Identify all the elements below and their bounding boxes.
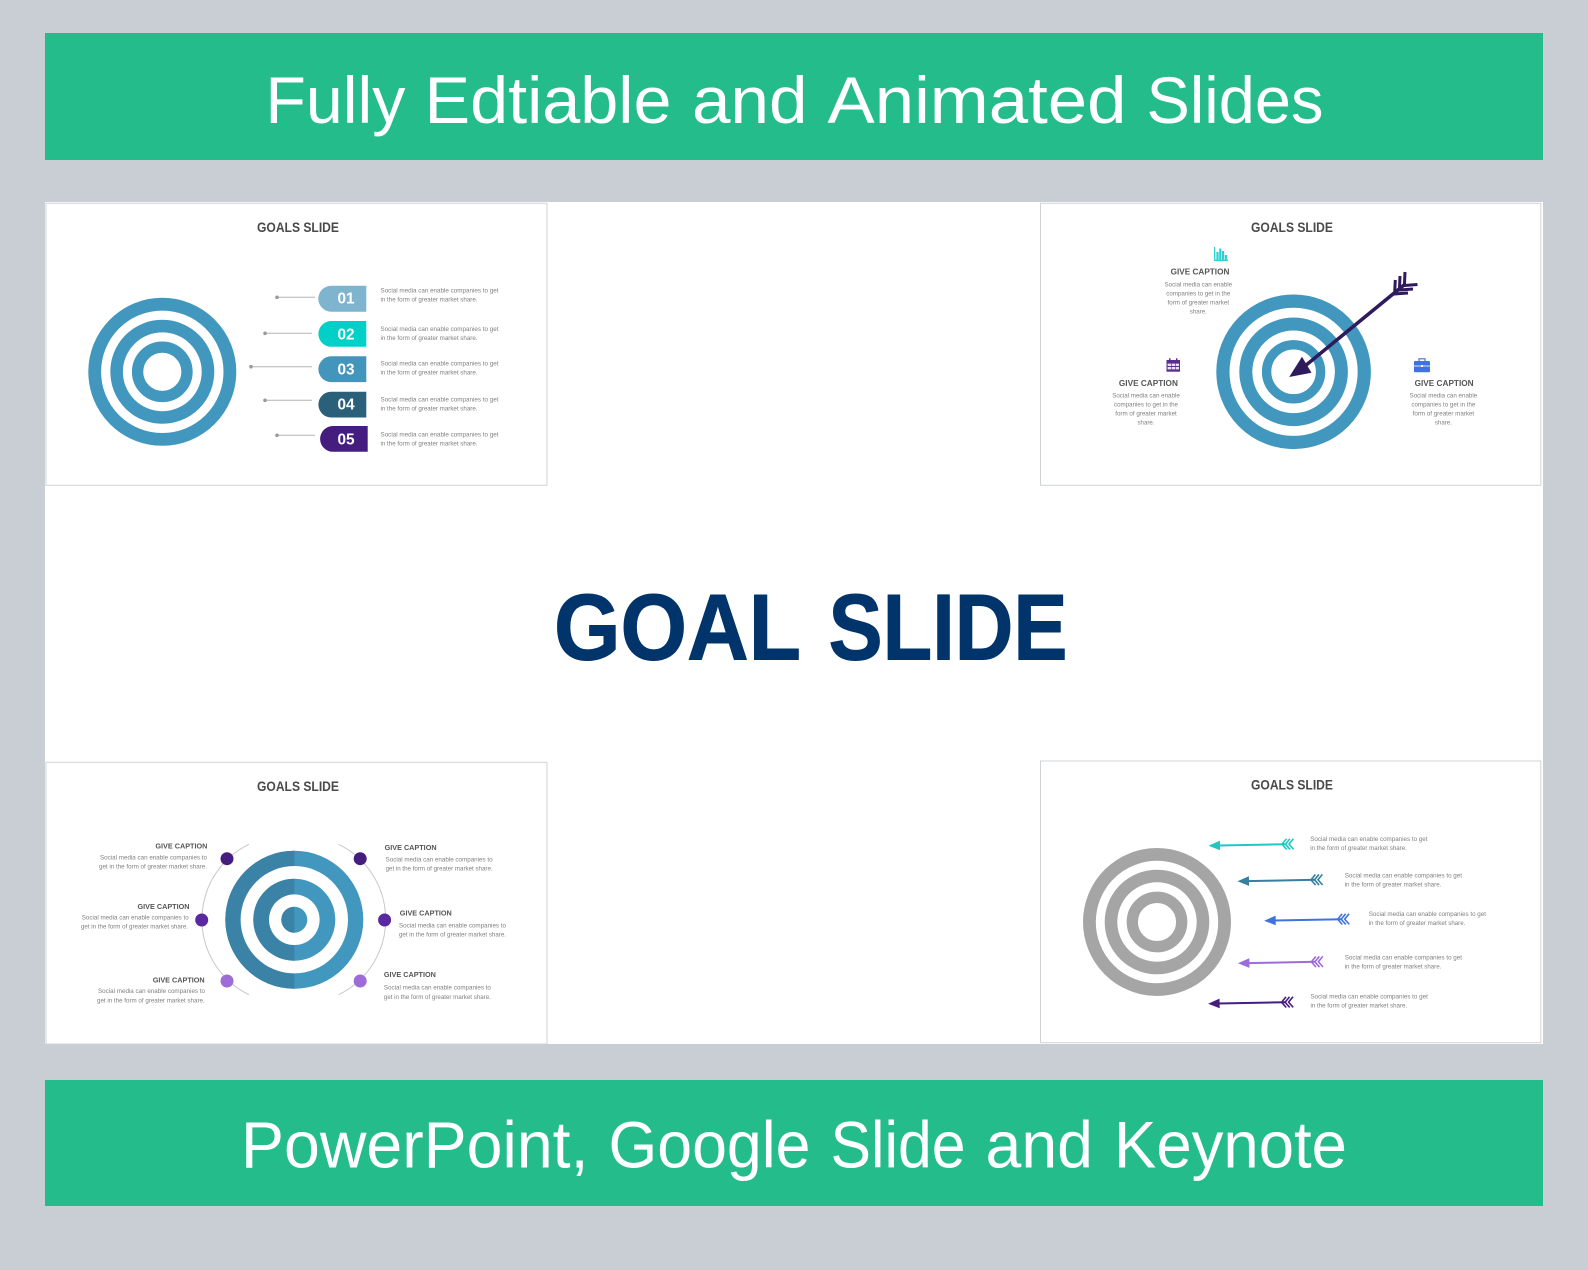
caption: middle right: Social media can enable companies to bbox=[399, 923, 506, 930]
caption: right: Social media can enable bbox=[1410, 392, 1478, 399]
white central area bbox=[45, 202, 1543, 1044]
numbered tab 02 bbox=[318, 321, 499, 347]
arrow 3 bbox=[1264, 914, 1349, 926]
top banner bbox=[45, 33, 1543, 160]
caption: right: companies to get in the bbox=[1411, 402, 1476, 409]
caption: left: share. bbox=[1138, 420, 1155, 427]
numbered tab 04: Social media can enable companies to get bbox=[380, 396, 499, 403]
numbered tab 01: Social media can enable companies to get bbox=[380, 288, 499, 295]
caption: top left: Social media can enable bbox=[1164, 281, 1233, 288]
bottom banner: and bbox=[986, 1108, 1093, 1182]
caption: lower right bbox=[384, 970, 491, 1001]
panel title: GOALS SLIDE bbox=[257, 779, 339, 794]
bottom banner bbox=[45, 1080, 1543, 1206]
caption: left: Social media can enable bbox=[1112, 392, 1180, 399]
caption: middle right: get in the form of greater market share. bbox=[399, 932, 506, 939]
numbered tab 01: in the form of greater market share. bbox=[380, 297, 478, 304]
numbered tab 04: in the form of greater market share. bbox=[380, 405, 478, 412]
numbered tab 03 bbox=[318, 356, 499, 382]
caption: right bbox=[1410, 379, 1478, 427]
text 2: in the form of greater market share. bbox=[1345, 882, 1442, 889]
text 4: in the form of greater market share. bbox=[1345, 963, 1442, 970]
numbered tab 03: Social media can enable companies to get bbox=[380, 360, 499, 367]
caption: left: form of greater market bbox=[1115, 411, 1177, 418]
caption: lower left: Social media can enable companies to bbox=[98, 988, 205, 995]
numbered tab 05: 05 bbox=[337, 431, 355, 448]
caption: upper right: GIVE CAPTION bbox=[385, 843, 437, 852]
bottom banner: Keynote bbox=[1114, 1108, 1347, 1182]
text 1: Social media can enable companies to get bbox=[1310, 836, 1428, 843]
panel: grey target with arrows slide bbox=[1040, 761, 1541, 1043]
text 5: Social media can enable companies to get bbox=[1310, 994, 1428, 1001]
top banner: Edtiable bbox=[424, 63, 672, 137]
caption: middle left: Social media can enable companies to bbox=[82, 915, 189, 922]
icon: bar chart bbox=[1214, 247, 1228, 261]
arrow 1 bbox=[1208, 839, 1294, 851]
caption: right: share. bbox=[1435, 420, 1452, 427]
numbered tab 04 bbox=[318, 392, 499, 418]
numbered tab 02: 02 bbox=[337, 326, 355, 343]
text 4 bbox=[1345, 954, 1462, 970]
main title: SLIDE bbox=[828, 574, 1068, 680]
caption: left: GIVE CAPTION bbox=[1119, 379, 1178, 388]
caption: upper left: get in the form of greater market share. bbox=[99, 864, 207, 871]
numbered tab 02: in the form of greater market share. bbox=[380, 335, 478, 342]
top banner: Animated bbox=[828, 63, 1126, 137]
arrow hitting the target bbox=[1289, 272, 1418, 377]
arrow 4 bbox=[1238, 956, 1323, 969]
caption: middle left: get in the form of greater market share. bbox=[81, 924, 188, 931]
top banner: Fully bbox=[265, 63, 405, 137]
bottom banner: PowerPoint, bbox=[241, 1108, 588, 1182]
text 2: Social media can enable companies to get bbox=[1345, 873, 1462, 880]
caption: lower right: GIVE CAPTION bbox=[384, 970, 436, 979]
caption: upper left: Social media can enable companies to bbox=[100, 855, 207, 862]
caption: lower right: Social media can enable companies to bbox=[384, 985, 491, 992]
arrow 2 bbox=[1237, 874, 1323, 887]
two-tone target bbox=[225, 851, 363, 989]
caption: middle left: GIVE CAPTION bbox=[138, 902, 190, 911]
caption: upper right: get in the form of greater market share. bbox=[386, 866, 493, 872]
caption: lower right: get in the form of greater market share. bbox=[384, 994, 491, 1001]
caption: top left: form of greater market bbox=[1168, 300, 1229, 307]
icon: calendar bbox=[1166, 358, 1180, 372]
numbered tab 03: 03 bbox=[337, 362, 355, 379]
text 1 bbox=[1310, 836, 1428, 852]
panel title: GOALS SLIDE bbox=[257, 220, 339, 235]
numbered tab 03: in the form of greater market share. bbox=[380, 369, 478, 376]
target rings bbox=[95, 304, 230, 439]
marker dots bbox=[195, 852, 391, 988]
caption: top left: GIVE CAPTION bbox=[1171, 268, 1230, 277]
text 5 bbox=[1310, 994, 1428, 1010]
caption: right: GIVE CAPTION bbox=[1415, 379, 1474, 388]
numbered tab 05: in the form of greater market share. bbox=[380, 441, 478, 448]
main title bbox=[554, 574, 1068, 680]
top banner: and bbox=[692, 63, 808, 137]
caption: lower left: GIVE CAPTION bbox=[153, 976, 205, 985]
caption: top left bbox=[1164, 268, 1233, 316]
text 1: in the form of greater market share. bbox=[1310, 845, 1407, 852]
caption: upper left bbox=[99, 842, 207, 871]
panel title: GOALS SLIDE bbox=[1251, 220, 1333, 235]
panel title: GOALS SLIDE bbox=[1251, 778, 1333, 792]
panel: target with arrow slide bbox=[1040, 203, 1541, 485]
caption: lower left bbox=[97, 976, 205, 1004]
numbered tab 04: 04 bbox=[337, 397, 355, 414]
caption: middle right: GIVE CAPTION bbox=[400, 909, 452, 918]
target rings bbox=[1223, 301, 1364, 442]
caption: middle left bbox=[81, 902, 190, 931]
text 3: Social media can enable companies to get bbox=[1369, 911, 1486, 918]
numbered tab 02: Social media can enable companies to get bbox=[380, 326, 499, 333]
text 3 bbox=[1369, 911, 1486, 927]
caption: upper left: GIVE CAPTION bbox=[155, 842, 207, 851]
text 2 bbox=[1345, 873, 1462, 889]
panel: six captions slide bbox=[46, 762, 547, 1044]
numbered tab 01 bbox=[318, 286, 499, 312]
surrounding arcs bbox=[202, 844, 386, 995]
top banner: Slides bbox=[1146, 63, 1324, 137]
bottom banner: Google bbox=[608, 1108, 810, 1182]
caption: top left: companies to get in the bbox=[1166, 290, 1231, 297]
bottom banner: Slide bbox=[830, 1108, 966, 1182]
text 5: in the form of greater market share. bbox=[1310, 1003, 1407, 1010]
main title: GOAL bbox=[554, 574, 801, 680]
caption: left bbox=[1112, 379, 1180, 427]
panel: numbered goals slide bbox=[46, 203, 547, 485]
caption: upper right bbox=[385, 843, 493, 872]
connector lines bbox=[249, 296, 315, 437]
numbered tab 05: Social media can enable companies to get bbox=[380, 432, 499, 439]
grey target rings bbox=[1089, 854, 1225, 990]
caption: left: companies to get in the bbox=[1114, 402, 1178, 409]
caption: right: form of greater market bbox=[1413, 411, 1474, 418]
numbered tab 01: 01 bbox=[337, 291, 355, 308]
text 4: Social media can enable companies to get bbox=[1345, 954, 1462, 961]
numbered tab 05 bbox=[320, 426, 499, 452]
text 3: in the form of greater market share. bbox=[1369, 920, 1466, 927]
caption: top left: share. bbox=[1190, 309, 1207, 316]
arrow 5 bbox=[1208, 997, 1293, 1009]
caption: lower left: get in the form of greater market share. bbox=[97, 997, 205, 1004]
icon: briefcase bbox=[1414, 359, 1430, 372]
caption: upper right: Social media can enable companies to bbox=[386, 856, 493, 864]
caption: middle right bbox=[399, 909, 506, 939]
